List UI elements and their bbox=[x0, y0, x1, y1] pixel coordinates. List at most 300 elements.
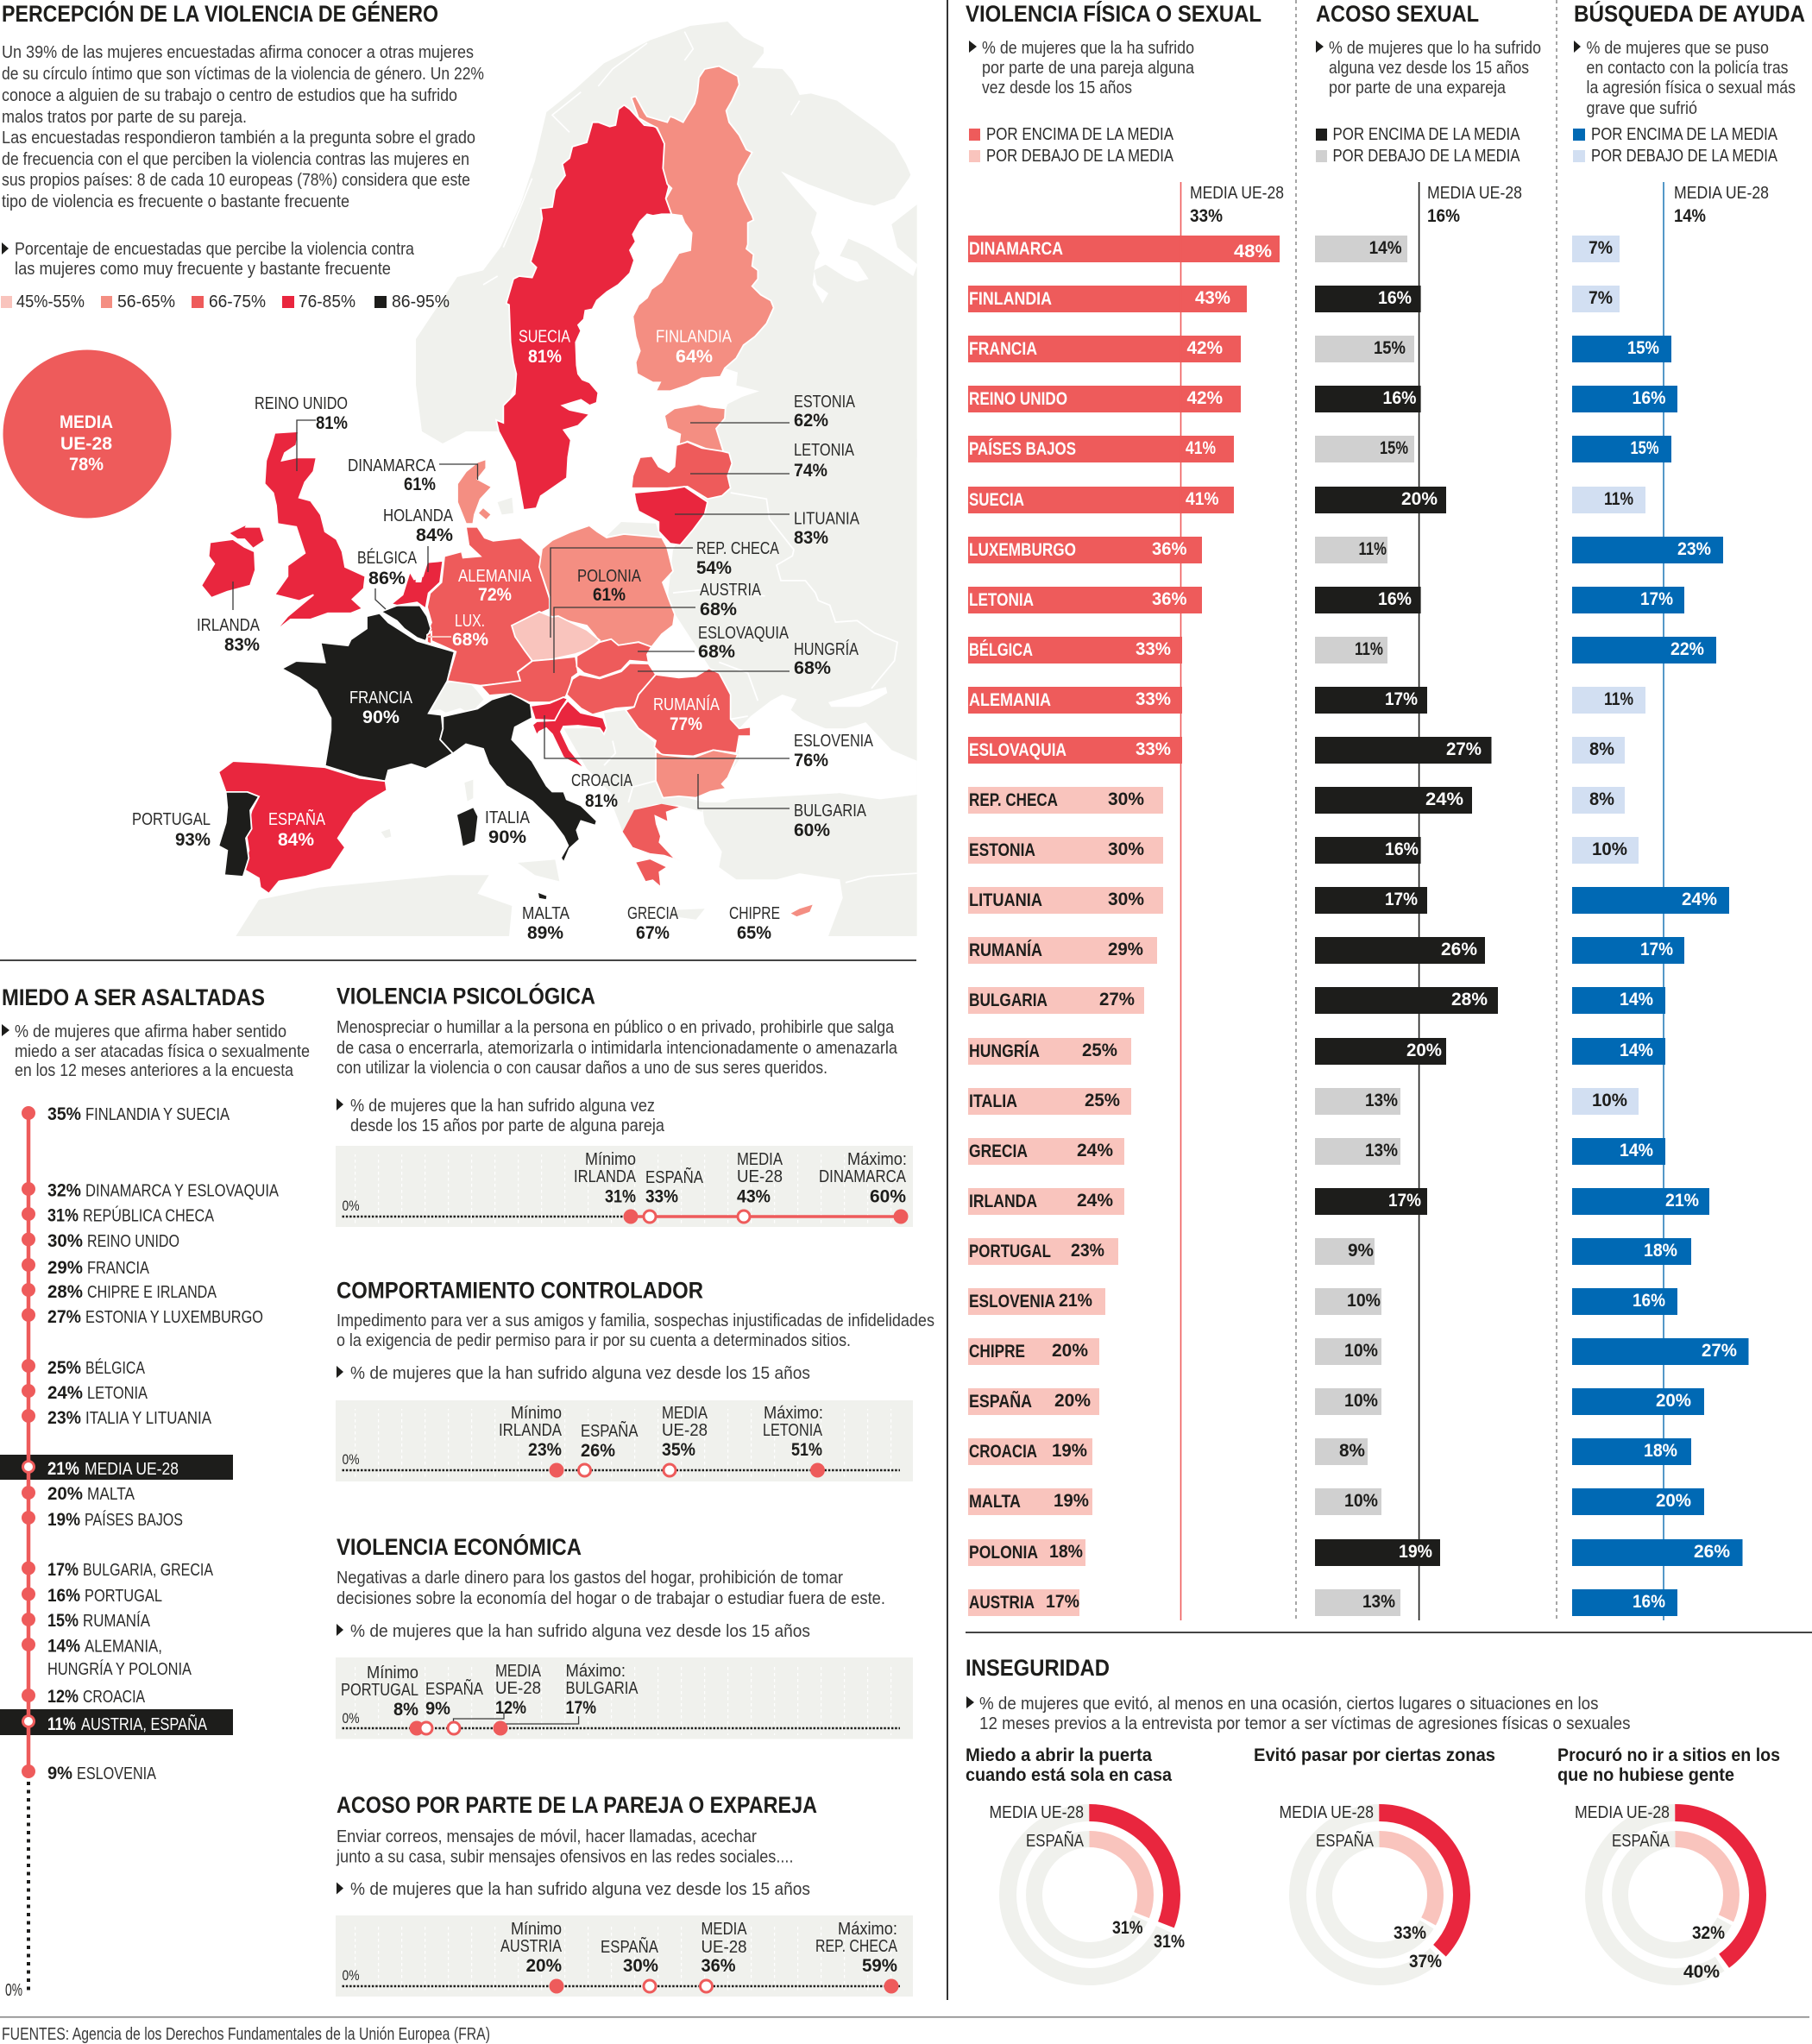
label: Estonia: 62% bbox=[794, 411, 828, 431]
bar chart: seeking help: 7% bbox=[1589, 238, 1613, 258]
range chart: 51% bbox=[791, 1440, 822, 1460]
donut: empty places bbox=[1557, 1745, 1780, 1982]
donut: empty places: 32% bbox=[1692, 1923, 1725, 1943]
subtitle bbox=[337, 1096, 665, 1135]
land: Scandinavia and northern Russia background bbox=[416, 22, 917, 457]
bar chart: harassment: 27% bbox=[1446, 739, 1482, 759]
description bbox=[337, 1017, 898, 1078]
description: Menospreciar o humillar a la persona en público o en privado, prohibirle que salga bbox=[337, 1017, 895, 1037]
intro text block: tipo de violencia es frecuente o bastante frecuente bbox=[2, 192, 349, 211]
description: o la exigencia de pedir permiso para ir por su cuenta a determinados sitios. bbox=[337, 1330, 851, 1350]
label: Italia: 90% bbox=[488, 827, 526, 847]
bar chart: harassment: 8% bbox=[1339, 1441, 1365, 1461]
donut: empty places: 40% bbox=[1683, 1962, 1720, 1982]
donut: opening the door: MEDIA UE-28 bbox=[989, 1802, 1084, 1822]
intro text block: Un 39% de las mujeres encuestadas afirma conocer a otras mujeres bbox=[2, 42, 474, 62]
label: Polonia bbox=[577, 566, 641, 605]
donut: avoided zones: Evitó pasar por ciertas zonas bbox=[1254, 1745, 1495, 1765]
label: Irlanda: 83% bbox=[224, 635, 260, 655]
panel: psychological violence bbox=[336, 982, 913, 1227]
bar chart: physical violence: 19% bbox=[1052, 1441, 1087, 1461]
range chart: ESPAÑA bbox=[645, 1167, 703, 1187]
sources footer: FUENTES: Agencia de los Derechos Fundamentales de la Unión Europea (FRA) bbox=[2, 2025, 490, 2044]
timeline labels: MALTA bbox=[87, 1484, 135, 1504]
label: España: 84% bbox=[278, 830, 314, 850]
intro text block: de frecuencia con el que perciben la violencia contras las mujeres en bbox=[2, 149, 469, 169]
range chart: LETONIA bbox=[763, 1420, 822, 1440]
range chart: 23% bbox=[528, 1440, 562, 1460]
range chart: AUSTRIA bbox=[500, 1936, 562, 1956]
panel: fear of assault bbox=[0, 984, 310, 2000]
bar chart: physical violence: 42% bbox=[1187, 388, 1223, 408]
panel: partner harassment bbox=[336, 1792, 913, 1997]
donut: empty places: ESPAÑA bbox=[1612, 1831, 1670, 1851]
bar chart: seeking help: 18% bbox=[1644, 1241, 1677, 1261]
range chart: DINAMARCA bbox=[819, 1167, 906, 1186]
bar chart: physical violence: 25% bbox=[1085, 1091, 1120, 1110]
timeline labels: 14% bbox=[47, 1636, 80, 1657]
circle: EU average 78%: MEDIA bbox=[60, 412, 113, 432]
label: Eslovaquia: 68% bbox=[698, 642, 735, 662]
label: Rumanía: 77% bbox=[670, 714, 702, 734]
bar chart: seeking help: 22% bbox=[1670, 639, 1704, 659]
bar chart: seeking help: 24% bbox=[1682, 890, 1717, 909]
subtitle: vez desde los 15 años bbox=[982, 78, 1132, 97]
timeline labels: 31% bbox=[47, 1206, 79, 1225]
bar chart: seeking help: 10% bbox=[1592, 1091, 1627, 1110]
bar chart: seeking help: 15% bbox=[1631, 438, 1659, 458]
bar chart: physical violence: 24% bbox=[1077, 1141, 1113, 1160]
label: Dinamarca bbox=[348, 456, 436, 494]
donut: avoided zones: ESPAÑA bbox=[1316, 1831, 1374, 1851]
range chart: Máximo: bbox=[838, 1919, 897, 1939]
bar chart: seeking help: 8% bbox=[1589, 789, 1614, 809]
range chart: MEDIA bbox=[495, 1661, 541, 1681]
bar chart: physical violence: REINO UNIDO bbox=[969, 389, 1067, 409]
subtitle bbox=[1574, 38, 1796, 118]
label: Croacia: 81% bbox=[585, 791, 618, 811]
range chart: 20% bbox=[526, 1956, 562, 1976]
heading: VIOLENCIA PSICOLÓGICA bbox=[337, 982, 595, 1009]
heading: ACOSO SEXUAL bbox=[1316, 1, 1479, 27]
range chart: UE-28 bbox=[495, 1678, 541, 1698]
range chart: BULGARIA bbox=[566, 1678, 639, 1698]
bar chart: seeking help: 10% bbox=[1592, 840, 1627, 859]
subtitle: % de mujeres que la han sufrido alguna vez bbox=[350, 1096, 655, 1116]
bar chart: physical violence: RUMANÍA bbox=[969, 940, 1042, 960]
timeline labels: LETONIA bbox=[87, 1383, 148, 1403]
timeline labels: AUSTRIA, ESPAÑA bbox=[81, 1714, 207, 1734]
bar chart: seeking help: 14% bbox=[1620, 990, 1653, 1009]
range chart: 35% bbox=[662, 1440, 695, 1460]
bar chart: physical violence: LETONIA bbox=[969, 590, 1034, 610]
bar chart: seeking help: 16% bbox=[1633, 1592, 1665, 1612]
subtitle: % de mujeres que afirma haber sentido bbox=[15, 1022, 286, 1041]
bar chart: physical violence: AUSTRIA bbox=[969, 1593, 1035, 1613]
range chart: PORTUGAL bbox=[341, 1680, 418, 1700]
bar chart: physical violence: 20% bbox=[1054, 1391, 1091, 1411]
countries: Sweden, Finland, Estonia bbox=[496, 66, 774, 510]
bar chart: physical violence: 33% bbox=[1136, 739, 1171, 759]
range chart: Máximo: bbox=[764, 1403, 823, 1423]
donut: empty places: que no hubiese gente bbox=[1557, 1765, 1734, 1785]
bar chart: seeking help: 27% bbox=[1702, 1341, 1737, 1361]
label: Portugal bbox=[132, 809, 211, 850]
label: Finlandia: 64% bbox=[676, 347, 713, 367]
bar chart: seeking help: 15% bbox=[1627, 338, 1659, 358]
map legend: 86-95% bbox=[392, 292, 450, 311]
label: Irlanda: IRLANDA bbox=[197, 615, 260, 635]
subtitle: % de mujeres que se puso bbox=[1586, 38, 1769, 58]
label: Bulgaria bbox=[794, 801, 866, 840]
bar chart: physical violence: 41% bbox=[1186, 438, 1216, 458]
label: Polonia: POLONIA bbox=[577, 566, 641, 586]
label: Luxemburgo: 68% bbox=[452, 630, 488, 650]
timeline labels: FINLANDIA Y SUECIA bbox=[85, 1104, 230, 1124]
bar chart: physical violence: GRECIA bbox=[969, 1141, 1028, 1161]
bar chart: harassment: 14% bbox=[1369, 238, 1402, 258]
label: Rep. Checa: REP. CHECA bbox=[696, 538, 779, 558]
bar chart: seeking help: 21% bbox=[1665, 1191, 1699, 1211]
bar chart: seeking help: 20% bbox=[1656, 1391, 1691, 1411]
bar chart: physical violence: 30% bbox=[1108, 789, 1144, 809]
bar chart: harassment: 28% bbox=[1451, 990, 1488, 1009]
subtitle: % de mujeres que la han sufrido alguna vez desde los 15 años bbox=[350, 1621, 810, 1641]
bar chart: harassment: 16% bbox=[1385, 840, 1419, 859]
range chart: ESPAÑA bbox=[581, 1421, 639, 1441]
bar chart: physical violence: PAÍSES BAJOS bbox=[969, 439, 1076, 459]
bar chart: physical violence: 30% bbox=[1108, 840, 1144, 859]
bar chart: physical violence: IRLANDA bbox=[969, 1192, 1037, 1211]
donut: opening the door: ESPAÑA bbox=[1026, 1831, 1084, 1851]
range chart: ESPAÑA bbox=[425, 1679, 483, 1699]
bar chart: seeking help: 14% bbox=[1620, 1041, 1653, 1060]
bar chart: physical violence: 18% bbox=[1049, 1542, 1083, 1562]
map legend bbox=[1, 292, 450, 311]
subtitle: % de mujeres que evitó, al menos en una ocasión, ciertos lugares o situaciones en los bbox=[979, 1694, 1598, 1714]
label: Austria: 68% bbox=[700, 600, 737, 619]
bar chart: physical violence: 41% bbox=[1186, 489, 1219, 509]
map legend: 76-85% bbox=[299, 292, 355, 311]
description: con utilizar la violencia o con causar daños a uno de sus seres queridos. bbox=[337, 1058, 827, 1078]
label: Francia: 90% bbox=[362, 708, 400, 727]
range chart: UE-28 bbox=[701, 1937, 747, 1957]
timeline labels: ESTONIA Y LUXEMBURGO bbox=[85, 1307, 263, 1327]
range chart bbox=[336, 1146, 913, 1227]
range chart: 26% bbox=[581, 1441, 615, 1461]
label: Rep. Checa: 54% bbox=[696, 558, 732, 578]
bar chart: harassment: 16% bbox=[1378, 589, 1412, 609]
axis zero label: 0% bbox=[5, 1980, 22, 2000]
label: Finlandia bbox=[656, 326, 732, 367]
bar chart: physical violence: BÉLGICA bbox=[969, 640, 1033, 660]
timeline labels: DINAMARCA Y ESLOVAQUIA bbox=[85, 1180, 279, 1201]
subtitle: miedo a ser atacadas física o sexualmente bbox=[15, 1041, 310, 1061]
bar chart: physical violence: MALTA bbox=[969, 1492, 1021, 1512]
description bbox=[337, 1568, 885, 1608]
intro text block: de su círculo íntimo que son víctimas de la violencia de género. Un 22% bbox=[2, 64, 484, 84]
bar chart: harassment: 15% bbox=[1380, 438, 1408, 458]
label: Lituania: 83% bbox=[794, 528, 828, 548]
subtitle bbox=[1316, 38, 1541, 97]
legend: POR ENCIMA DE LA MEDIA bbox=[1591, 124, 1777, 144]
label: Italia: ITALIA bbox=[485, 808, 530, 827]
bar chart: seeking help: 16% bbox=[1633, 388, 1666, 408]
subtitle: en los 12 meses anteriores a la encuesta bbox=[15, 1060, 294, 1080]
label: Alemania: 72% bbox=[478, 585, 512, 605]
range chart: 0% bbox=[342, 1451, 359, 1468]
timeline labels: 32% bbox=[47, 1180, 81, 1201]
bar chart: physical violence: LITUANIA bbox=[969, 890, 1042, 910]
description: Negativas a darle dinero para los gastos del hogar, prohibición de tomar bbox=[337, 1568, 843, 1588]
range chart: Máximo: bbox=[847, 1149, 907, 1169]
timeline labels: 9% bbox=[47, 1764, 72, 1783]
bar chart: seeking help: 7% bbox=[1589, 288, 1613, 308]
label: Croacia: CROACIA bbox=[571, 770, 632, 790]
bar chart: harassment: 19% bbox=[1399, 1542, 1432, 1562]
subtitle: % de mujeres que la han sufrido alguna vez desde los 15 años bbox=[350, 1879, 810, 1899]
label: Bulgaria: 60% bbox=[794, 821, 830, 840]
bar chart: harassment: 26% bbox=[1441, 940, 1477, 959]
panel: physical or sexual violence bbox=[966, 0, 1284, 1620]
bar chart: seeking help: 14% bbox=[1620, 1141, 1653, 1160]
label: Eslovenia: ESLOVENIA bbox=[794, 731, 873, 751]
range chart: IRLANDA bbox=[499, 1420, 562, 1440]
average label: 16% bbox=[1427, 206, 1460, 226]
label: Malta: MALTA bbox=[522, 903, 569, 923]
circle: EU average 78%: 78% bbox=[69, 455, 104, 475]
range chart: 30% bbox=[623, 1956, 658, 1976]
bar chart: physical violence: BULGARIA bbox=[969, 991, 1048, 1010]
donut: avoided zones: 33% bbox=[1394, 1923, 1426, 1943]
bar chart: physical violence: REP. CHECA bbox=[969, 790, 1058, 810]
label: Rumanía bbox=[653, 695, 720, 734]
bar chart: physical violence: 20% bbox=[1052, 1341, 1088, 1361]
legend bbox=[1316, 124, 1520, 166]
range chart: MEDIA bbox=[662, 1403, 708, 1423]
timeline labels: 16% bbox=[47, 1586, 80, 1606]
label: Hungría bbox=[794, 639, 859, 678]
bar chart: harassment: 13% bbox=[1362, 1592, 1395, 1612]
description bbox=[336, 1827, 794, 1867]
label: Francia bbox=[349, 688, 412, 727]
bar chart: physical violence: ESTONIA bbox=[969, 840, 1035, 860]
connector lines bbox=[233, 420, 790, 808]
bar chart: harassment: 10% bbox=[1344, 1341, 1378, 1361]
label: Holanda: HOLANDA bbox=[383, 506, 453, 525]
label: España: ESPAÑA bbox=[268, 809, 325, 829]
legend: POR ENCIMA DE LA MEDIA bbox=[986, 124, 1173, 144]
bar chart: seeking help bbox=[1572, 182, 1748, 1620]
bar chart: physical violence: 29% bbox=[1108, 940, 1143, 959]
label: Letonia: LETONIA bbox=[794, 440, 854, 460]
range chart: Mínimo bbox=[511, 1403, 562, 1423]
heading: VIOLENCIA ECONÓMICA bbox=[337, 1533, 582, 1560]
label: Holanda: 84% bbox=[416, 525, 453, 545]
label: Letonia: 74% bbox=[794, 461, 827, 481]
bar chart: harassment: 11% bbox=[1358, 539, 1387, 559]
donut: opening the door bbox=[966, 1745, 1185, 1977]
label: Hungría: HUNGRÍA bbox=[794, 639, 859, 659]
timeline labels: 25% bbox=[47, 1358, 81, 1378]
label: Luxemburgo bbox=[452, 611, 488, 650]
label: Malta: 89% bbox=[527, 923, 563, 943]
timeline labels: 28% bbox=[47, 1282, 83, 1302]
countries: eastern Europe bbox=[567, 442, 813, 916]
range chart bbox=[336, 1915, 913, 1997]
label: Suecia bbox=[519, 326, 570, 367]
description: decisiones sobre la economía del hogar o de trabajar o estudiar fuera de este. bbox=[337, 1588, 885, 1608]
heading: VIOLENCIA FÍSICA O SEXUAL bbox=[966, 0, 1261, 27]
label: Portugal: PORTUGAL bbox=[132, 809, 211, 829]
range chart: 0% bbox=[342, 1198, 359, 1214]
label: Rumanía: RUMANÍA bbox=[653, 695, 720, 714]
label: Polonia: 61% bbox=[593, 585, 626, 605]
timeline axis bbox=[22, 1106, 35, 1995]
subtitle bbox=[966, 1694, 1631, 1733]
range chart: REP. CHECA bbox=[815, 1936, 897, 1956]
bar chart: seeking help: 11% bbox=[1604, 489, 1633, 509]
bar chart: physical violence: DINAMARCA bbox=[969, 239, 1063, 259]
bar chart: physical violence: FINLANDIA bbox=[969, 289, 1052, 309]
subtitle: por parte de una pareja alguna bbox=[982, 58, 1195, 78]
timeline labels: REINO UNIDO bbox=[87, 1231, 179, 1251]
label: Bélgica bbox=[357, 548, 417, 588]
panel: controlling behaviour bbox=[336, 1277, 934, 1481]
range chart: IRLANDA bbox=[574, 1167, 636, 1186]
timeline labels: 15% bbox=[47, 1611, 79, 1631]
legend: POR DEBAJO DE LA MEDIA bbox=[1332, 146, 1520, 166]
subtitle bbox=[969, 38, 1195, 97]
donut: opening the door: cuando está sola en casa bbox=[966, 1765, 1172, 1785]
average label: MEDIA UE-28 bbox=[1190, 183, 1284, 203]
bar chart: physical violence: ESLOVENIA bbox=[969, 1292, 1055, 1311]
timeline labels: 29% bbox=[47, 1258, 83, 1278]
timeline labels: ALEMANIA, bbox=[85, 1636, 162, 1657]
timeline labels: 23% bbox=[47, 1408, 81, 1428]
range chart bbox=[336, 1657, 913, 1739]
bar chart: physical violence: PORTUGAL bbox=[969, 1242, 1051, 1261]
bar chart: seeking help: 17% bbox=[1640, 589, 1673, 609]
bar chart: seeking help: 20% bbox=[1656, 1491, 1691, 1511]
average label bbox=[1674, 183, 1769, 226]
subtitle: alguna vez desde los 15 años bbox=[1329, 58, 1529, 78]
bar chart: physical violence: 19% bbox=[1054, 1491, 1089, 1511]
timeline labels: FRANCIA bbox=[87, 1258, 149, 1278]
label: Croacia bbox=[571, 770, 632, 811]
circle: EU average 78% bbox=[3, 350, 171, 518]
bar chart: seeking help: 17% bbox=[1640, 940, 1673, 959]
range chart: Mínimo bbox=[511, 1919, 562, 1939]
range chart: 33% bbox=[645, 1187, 678, 1206]
timeline labels: 11% bbox=[47, 1714, 76, 1734]
bar chart: harassment: 16% bbox=[1382, 388, 1417, 408]
subtitle bbox=[2, 1022, 310, 1080]
range chart: 43% bbox=[737, 1187, 771, 1206]
timeline labels: BULGARIA, GRECIA bbox=[83, 1560, 213, 1580]
countries: western Europe bbox=[201, 431, 597, 899]
label: España bbox=[268, 809, 325, 850]
range chart: Mínimo bbox=[585, 1149, 636, 1169]
range chart: 36% bbox=[701, 1956, 736, 1976]
bar chart: physical violence: 17% bbox=[1046, 1592, 1079, 1612]
timeline labels: 12% bbox=[47, 1687, 79, 1707]
average label: MEDIA UE-28 bbox=[1674, 183, 1769, 203]
timeline labels: 30% bbox=[47, 1231, 83, 1251]
donut: opening the door: Miedo a abrir la puerta bbox=[966, 1745, 1152, 1765]
countries: central Europe bbox=[481, 525, 675, 769]
bar chart: physical violence: ALEMANIA bbox=[969, 690, 1051, 710]
label: Austria bbox=[700, 580, 761, 619]
range chart: 0% bbox=[342, 1710, 359, 1726]
label: Estonia bbox=[794, 392, 855, 431]
label: Eslovenia: 76% bbox=[794, 751, 828, 770]
label: Rep. Checa bbox=[696, 538, 779, 578]
subtitle: desde los 15 años por parte de alguna pareja bbox=[350, 1116, 665, 1135]
intro text block: conoce a alguien de su trabajo o centro de estudios que ha sufrido bbox=[2, 85, 457, 105]
bar chart: harassment bbox=[1315, 182, 1498, 1620]
label: Finlandia: FINLANDIA bbox=[656, 326, 732, 347]
label: Estonia: ESTONIA bbox=[794, 392, 855, 412]
timeline labels bbox=[47, 1104, 279, 1783]
heading: perception: PERCEPCIÓN DE LA VIOLENCIA DE GÉNERO bbox=[2, 0, 438, 27]
bar chart: seeking help: 11% bbox=[1604, 689, 1633, 709]
map of Europe bbox=[132, 22, 917, 943]
label: Chipre: 65% bbox=[737, 923, 771, 943]
description bbox=[337, 1311, 934, 1350]
label: Irlanda bbox=[197, 615, 260, 655]
legend bbox=[969, 124, 1173, 166]
description: Enviar correos, mensajes de móvil, hacer llamadas, acechar bbox=[337, 1827, 757, 1846]
label: Letonia bbox=[794, 440, 854, 481]
subtitle: % de mujeres que la han sufrido alguna vez desde los 15 años bbox=[350, 1363, 810, 1383]
range chart: 17% bbox=[566, 1698, 596, 1718]
bar chart: harassment: 13% bbox=[1365, 1141, 1398, 1160]
subtitle: grave que sufrió bbox=[1586, 98, 1697, 118]
label: Suecia: SUECIA bbox=[519, 326, 570, 347]
label: Francia: FRANCIA bbox=[349, 688, 412, 708]
map subtitle: las mujeres como muy frecuente y bastante frecuente bbox=[15, 259, 391, 279]
bar chart: physical violence: ESLOVAQUIA bbox=[969, 740, 1066, 760]
timeline labels: 27% bbox=[47, 1307, 81, 1327]
legend bbox=[1573, 124, 1777, 166]
average label: 33% bbox=[1190, 206, 1223, 226]
timeline labels: BÉLGICA bbox=[85, 1358, 145, 1378]
range chart: Máximo: bbox=[566, 1661, 626, 1681]
map subtitle: Porcentaje de encuestadas que percibe la violencia contra bbox=[15, 239, 415, 259]
bar chart: physical violence: 24% bbox=[1077, 1191, 1113, 1211]
label: Suecia: 81% bbox=[528, 347, 562, 367]
heading: INSEGURIDAD bbox=[966, 1655, 1110, 1681]
timeline labels: 20% bbox=[47, 1484, 83, 1504]
bar chart: physical violence: 30% bbox=[1108, 890, 1144, 909]
bar chart: harassment: 10% bbox=[1344, 1391, 1378, 1411]
bar chart: physical violence: 25% bbox=[1082, 1041, 1117, 1060]
bar chart: seeking help: 23% bbox=[1677, 539, 1711, 559]
bar chart: physical violence: CROACIA bbox=[969, 1442, 1037, 1462]
bar chart: harassment: 15% bbox=[1374, 338, 1406, 358]
subtitle: por parte de una expareja bbox=[1329, 78, 1507, 97]
label: Bulgaria: BULGARIA bbox=[794, 801, 866, 821]
label: Chipre: CHIPRE bbox=[729, 903, 780, 923]
range chart: UE-28 bbox=[662, 1420, 708, 1440]
bar chart: physical violence bbox=[968, 182, 1280, 1620]
label: Dinamarca: 61% bbox=[404, 475, 436, 494]
bar chart: seeking help: 16% bbox=[1633, 1291, 1665, 1311]
label: Lituania bbox=[794, 509, 859, 548]
label: Grecia: 67% bbox=[636, 923, 670, 943]
label: Austria: AUSTRIA bbox=[700, 580, 761, 600]
